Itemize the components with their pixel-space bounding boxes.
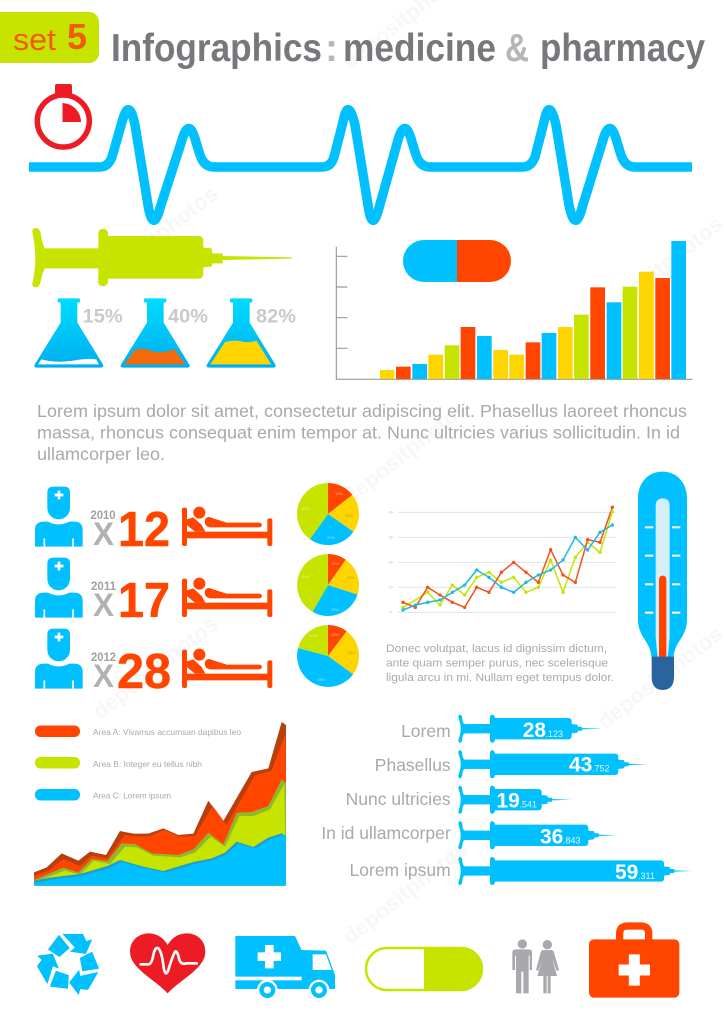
text block: intro paragraph: ullamcorper leo. [37,444,165,464]
panel: staff to patient ratios [35,487,272,699]
heartbeat line [29,110,692,220]
legend item B: Area B: Integer eu tellus nibh [93,760,202,769]
pie 2011 [297,554,359,616]
title: pharmacy [540,27,705,70]
bar Nunc ultricies: Nunc ultricies [346,789,451,809]
legend item A [35,726,241,737]
icon: hospital bed [182,578,272,617]
text block: intro paragraph: Lorem ipsum dolor sit amet, consectetur adipiscing elit. Phasellus laoreet rhoncus [37,401,687,421]
badge: set 5: 5 [67,16,87,57]
flask 15% [34,298,103,368]
pie 2011: 20% [347,575,355,580]
multiplier: X [93,658,115,694]
bar In id ullamcorper: .843 [563,835,581,845]
year: 2010 [90,510,116,522]
pie 2011: 10% [331,561,339,566]
multiplier: X [93,587,115,623]
bar Phasellus: Phasellus [375,755,451,775]
bar Lorem: 28 [523,719,546,742]
number 12: 12 [118,503,170,557]
line chart: 40 [389,511,393,515]
pie 2010 [297,483,359,545]
bar chart [336,241,693,379]
badge: set 5 [0,12,99,63]
title: & [505,27,529,70]
pie 2011: 30% [331,607,339,612]
bar Lorem ipsum: 59 [615,861,638,884]
legend item C [35,789,171,800]
syringe bar chart [321,715,693,885]
text block: chart note [386,643,614,684]
icon: hospital bed [182,507,272,546]
pie 2012: 20% [309,633,317,638]
text block: chart note: ligula arcu in mi. Nullam eget tempus dolor. [386,672,614,684]
row 2012 [35,629,272,699]
title: : [325,27,338,70]
watermark: depositphotos [88,611,222,724]
pie 2010: 20% [345,513,353,518]
number 28: 28 [117,645,171,699]
label 82%: 82% [256,306,296,328]
watermark: depositphotos [338,836,472,949]
icon: doctor [35,558,83,618]
pie 2010: 40% [301,506,309,511]
icon: green pill [366,947,483,990]
number 17: 17 [118,574,170,628]
legend item B [35,757,202,769]
line chart [389,506,616,615]
text block: chart note: ante quam semper purus, nec scelerisque [386,658,608,670]
icon: thermometer [638,472,687,690]
watermark: depositphotos [593,621,724,734]
bar Nunc ultricies: 19 [496,790,520,813]
bar In id ullamcorper [321,821,617,849]
title [111,27,705,70]
line chart: 0 [390,611,392,615]
icon: stopwatch [37,84,89,147]
bar In id ullamcorper: In id ullamcorper [321,823,451,843]
flask 40% [121,298,190,368]
text block: intro paragraph: massa, rhoncus consequat enim tempor at. Nunc ultricies varius sollicitudin. In id [37,422,680,442]
text block: intro paragraph [37,401,687,464]
pie 2010: 25% [327,535,335,540]
title: medicine [343,27,496,70]
bar Lorem: Lorem [401,721,451,741]
multiplier: X [93,516,115,552]
year: 2012 [91,652,116,664]
pie 2011: 40% [301,574,309,579]
line chart: 20 [389,561,393,565]
pie 2012 [297,625,359,687]
watermark: depositphotos [593,211,724,324]
row 2010 [35,487,272,557]
flask 82% [207,298,276,368]
icon: heart with pulse [130,933,205,993]
icon: green syringe [32,228,292,287]
bar Phasellus [375,750,648,778]
row 2011 [35,558,272,628]
icon: first aid kit [589,926,679,998]
pie charts [297,483,359,687]
bar Lorem ipsum [350,857,693,885]
bar Nunc ultricies: .541 [520,800,537,810]
icon: man and woman [512,939,559,993]
line chart: 10 [389,586,393,590]
icon: doctor [35,629,83,689]
legend item A: Area A: Vivamus accumsan dapibus leo [93,728,241,737]
text block: chart note: Donec volutpat, lacus id dignissim dictum, [386,643,607,655]
bar Nunc ultricies [346,786,571,814]
icon: recycle [33,934,105,997]
badge: set 5: set [13,22,56,57]
watermark: depositphotos [88,181,222,294]
bar Lorem ipsum: .311 [638,871,655,881]
icon: ambulance [233,936,335,1000]
line chart: 30 [389,536,393,540]
title: Infographics [111,27,322,70]
pie 2010: 15% [335,491,343,496]
pie 2012: 10% [331,632,339,637]
year: 2011 [91,581,117,593]
area chart legend [35,726,241,800]
bar Phasellus: 43 [569,753,592,776]
pie 2012: 45% [317,677,325,682]
bar In id ullamcorper: 36 [540,825,563,848]
area chart [34,722,286,886]
icon: doctor [35,487,83,547]
icon: capsule blue and red [403,240,511,282]
label 40%: 40% [168,306,208,328]
bar Lorem [401,715,602,743]
flasks [34,298,296,368]
watermark: depositphotos [338,396,472,509]
legend item C: Area C: Lorem ipsum [93,792,171,800]
bar Lorem ipsum: Lorem ipsum [350,860,451,880]
bar Lorem: .123 [546,729,563,739]
icon: hospital bed [182,649,272,688]
label 15%: 15% [83,306,123,328]
bar Phasellus: .752 [592,763,610,773]
pie 2012: 25% [348,650,356,655]
